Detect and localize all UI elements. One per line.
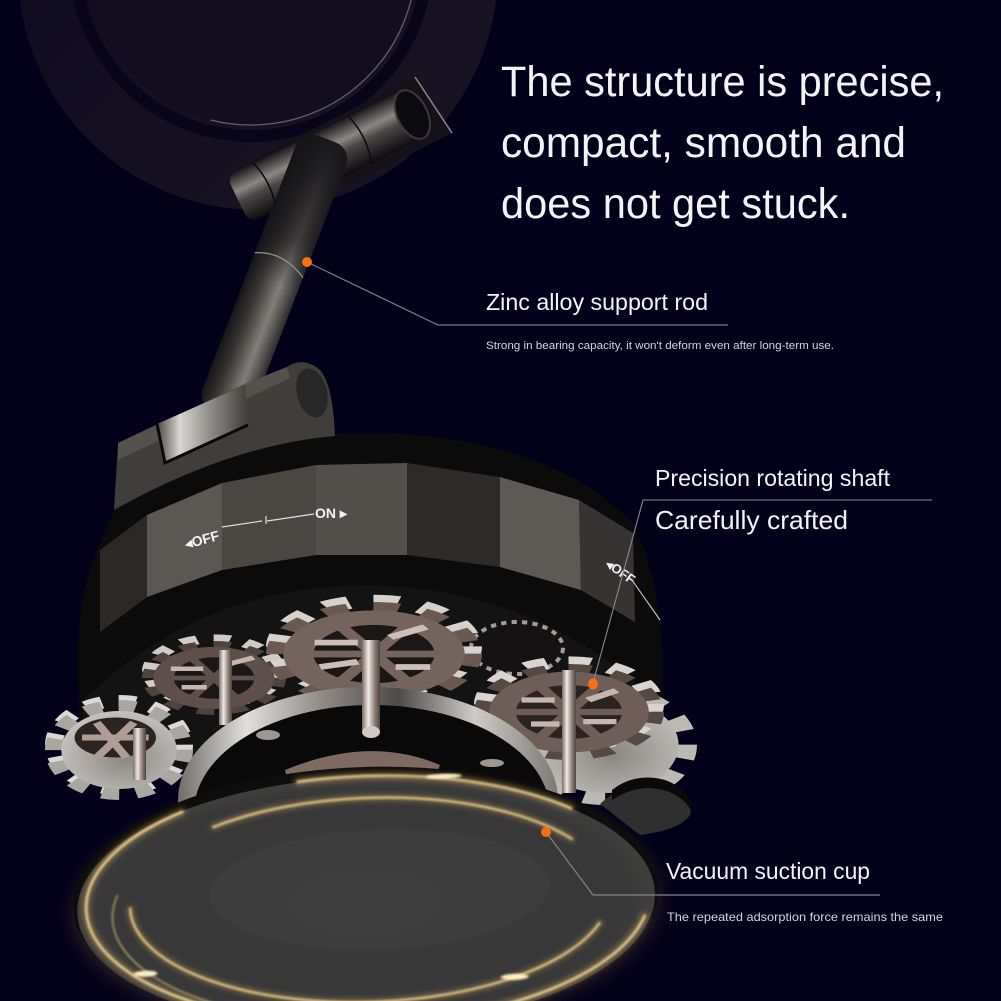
gold light rings (82, 766, 654, 1001)
upper hinge barrel (227, 77, 452, 223)
vacuum suction cup (69, 757, 663, 1001)
dial marking: off / on (182, 505, 348, 552)
gear: rear left (151, 639, 277, 711)
headline: The structure is precise, (501, 58, 944, 106)
silver retaining plate (178, 640, 558, 919)
headline: compact, smooth and (501, 119, 906, 167)
dial marking: right off: ◂OFF (602, 556, 638, 587)
dial marking: right off (602, 556, 660, 620)
zinc alloy support rod (196, 129, 352, 424)
headline (501, 58, 944, 228)
main body black housing (78, 433, 665, 770)
callout: vacuum suction cup: The repeated adsorption force remains the same (667, 910, 943, 924)
precision shafts (133, 650, 576, 793)
callout: zinc alloy support rod: Strong in bearing capacity, it won't deform even after long-term use. (486, 340, 834, 352)
lower bracket with hinge (114, 362, 335, 510)
gear: front left silver (54, 701, 184, 794)
gear: small dark cogwheel (471, 622, 563, 674)
gear: right bronze with highlight teeth (485, 662, 653, 754)
callout: precision rotating shaft: Precision rotating shaft (655, 465, 891, 491)
callout: zinc alloy support rod: Zinc alloy support rod (486, 289, 708, 315)
suction cup pull tab (600, 778, 692, 835)
callout: precision rotating shaft (588, 465, 932, 690)
callout: precision rotating shaft: Carefully crafted (655, 505, 848, 535)
callout: zinc alloy support rod (302, 257, 834, 352)
dial marking: off / on: ◂OFF (182, 527, 221, 552)
gear: right silver (524, 692, 686, 798)
dial marking: off / on: ON ▸ (315, 505, 348, 521)
gear: large centre (279, 601, 469, 700)
callout: vacuum suction cup (541, 827, 943, 924)
faceted dial band (100, 463, 660, 632)
callout: vacuum suction cup: Vacuum suction cup (666, 858, 870, 884)
magnetic mount disc (18, 0, 498, 210)
headline: does not get stuck. (501, 180, 850, 228)
